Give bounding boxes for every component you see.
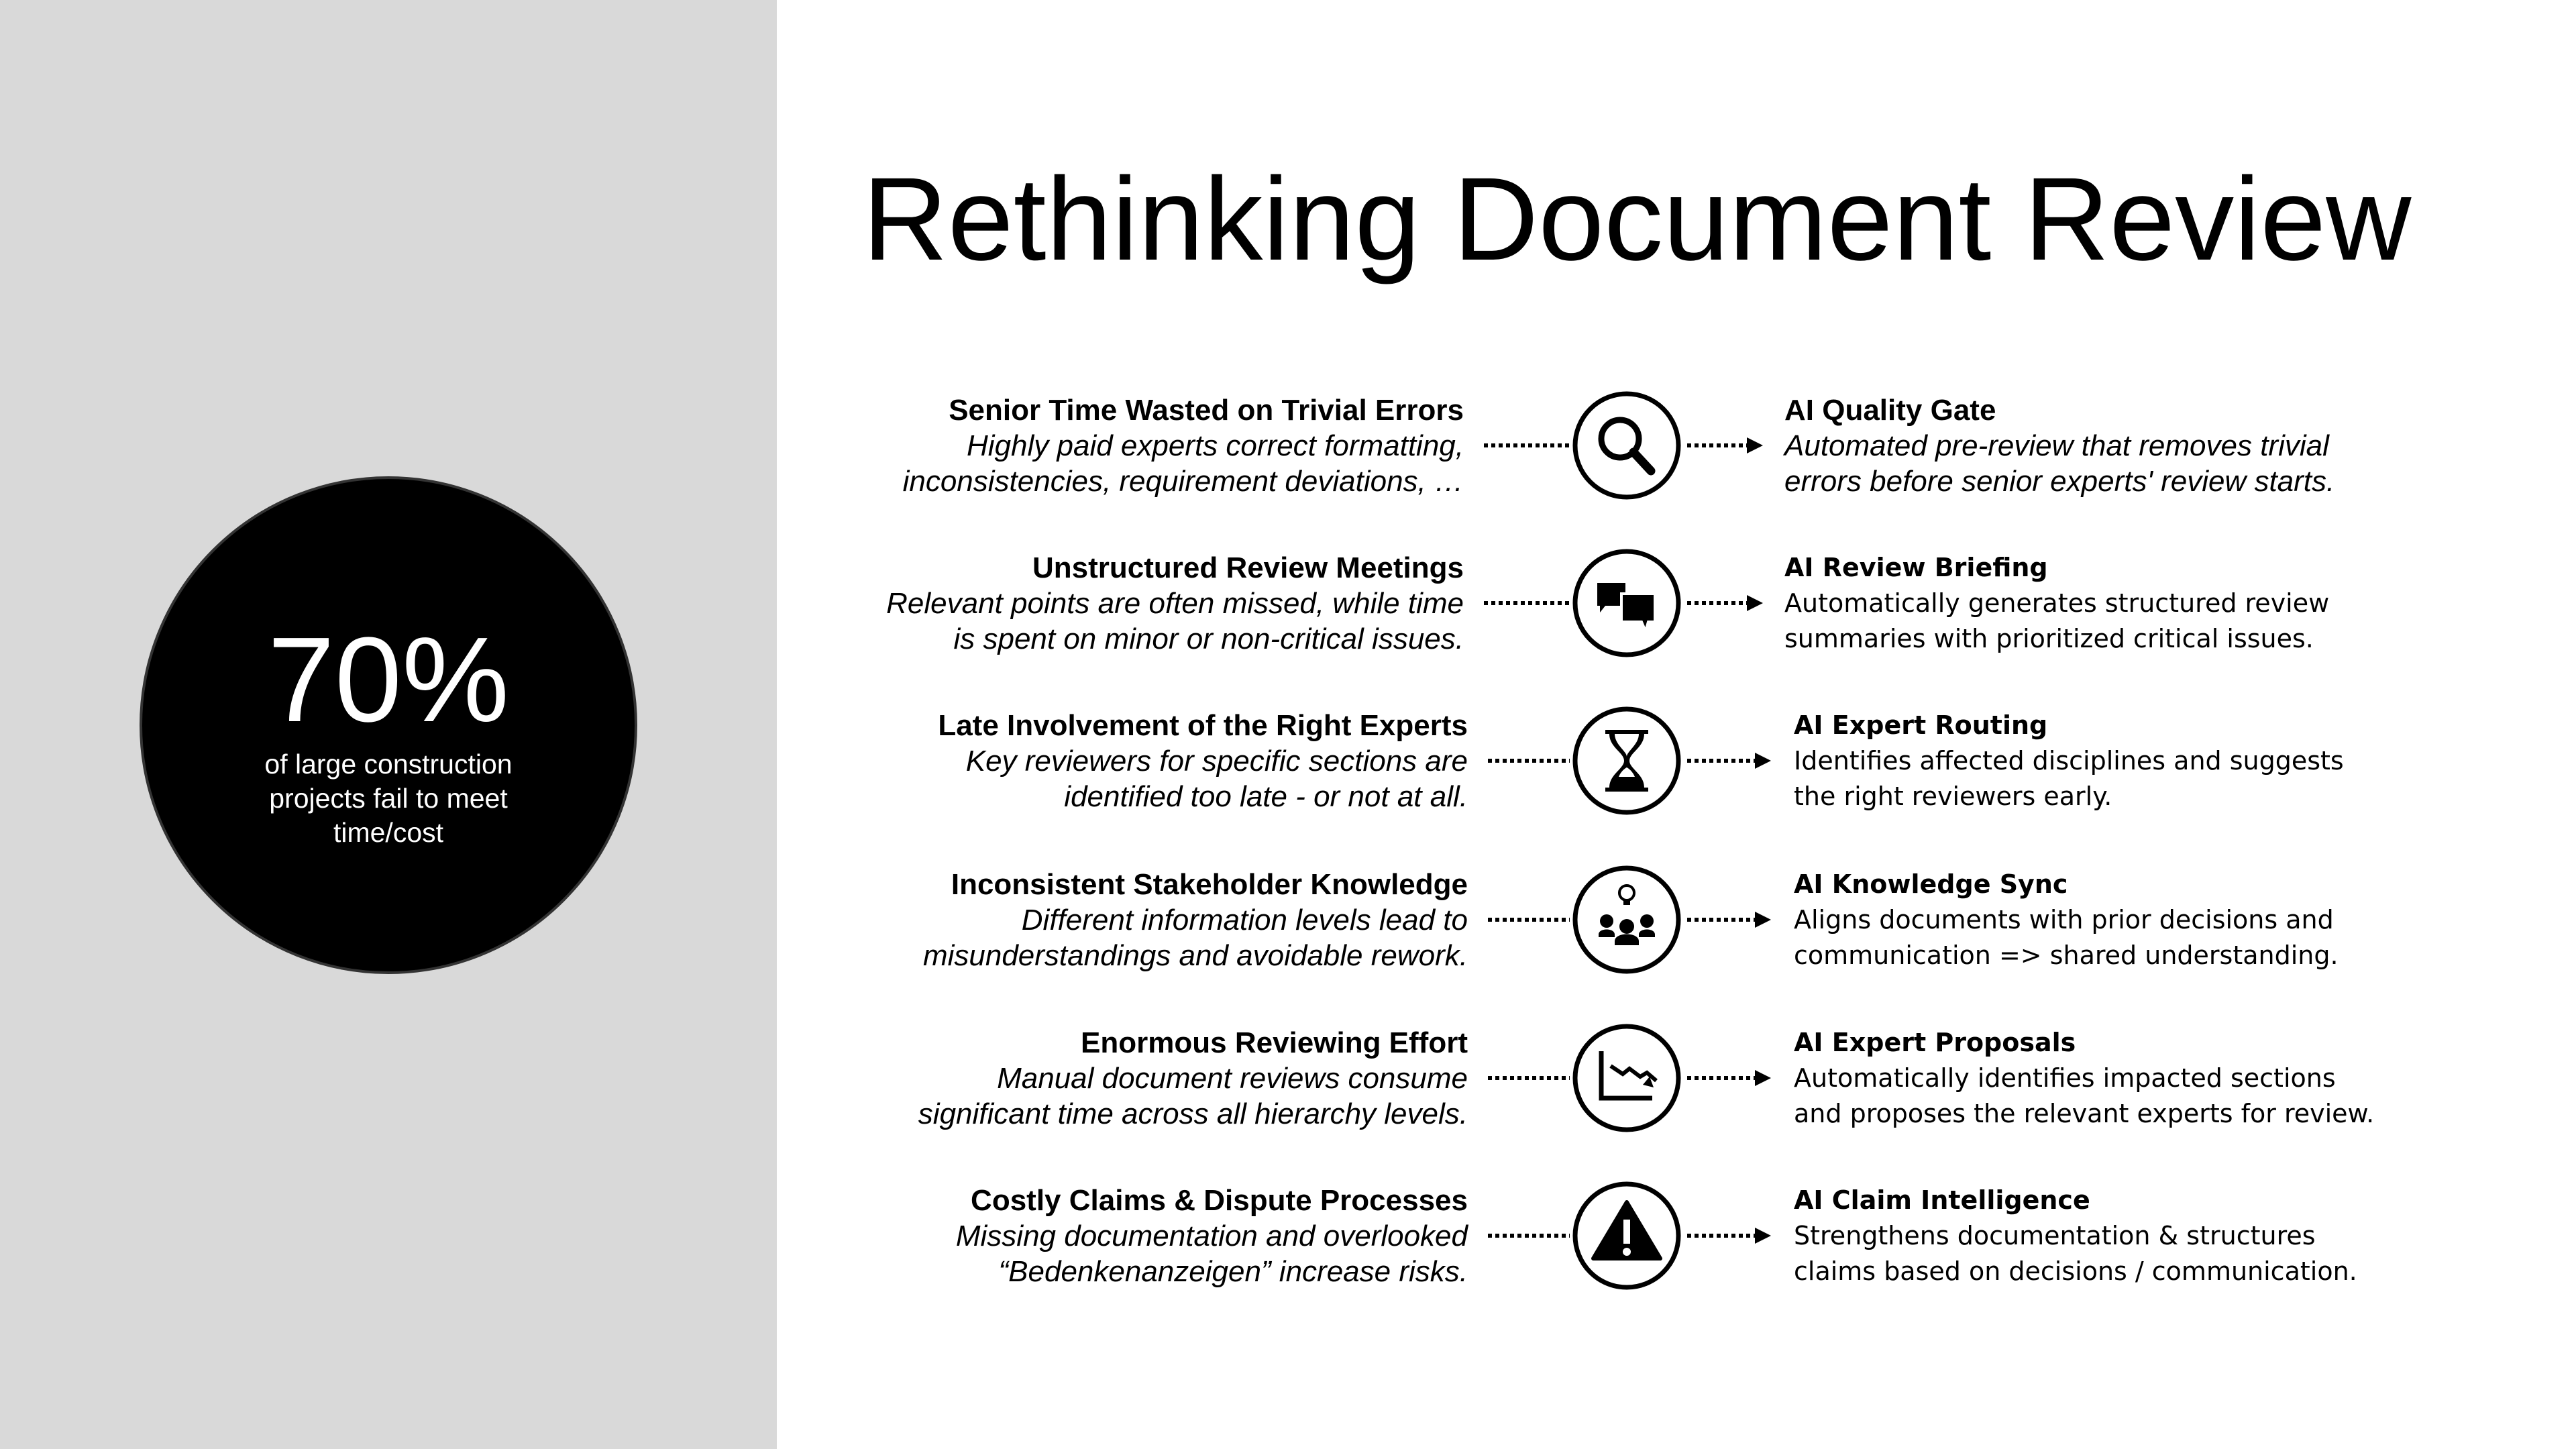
solution 2: AI Review Briefing <box>1784 553 2048 582</box>
solution 4 <box>1794 869 2339 970</box>
problem 3 <box>938 709 1468 813</box>
solution 4: AI Knowledge Sync <box>1794 869 2068 899</box>
problem 2: Unstructured Review Meetings <box>1032 551 1464 584</box>
solution 1 <box>1783 394 2334 498</box>
stat number: 70% <box>268 612 509 747</box>
title: Rethinking Document Review <box>863 154 2411 285</box>
problem 3: Key reviewers for specific sections are <box>966 745 1468 777</box>
problem 2: Relevant points are often missed, while time <box>886 587 1464 620</box>
problem 4: misunderstandings and avoidable rework. <box>923 939 1468 972</box>
stat caption: of large construction <box>264 749 513 780</box>
icon: warning <box>1575 1184 1678 1287</box>
solution 6: claims based on decisions / communication. <box>1794 1256 2357 1286</box>
problem 6: “Bedenkenanzeigen” increase risks. <box>998 1255 1468 1288</box>
solution 5 <box>1794 1028 2374 1128</box>
problem 5 <box>918 1026 1468 1130</box>
problem 5: significant time across all hierarchy levels. <box>918 1097 1468 1130</box>
solution 6: AI Claim Intelligence <box>1794 1185 2090 1215</box>
problem 3: identified too late - or not at all. <box>1064 780 1468 813</box>
icon: declining chart <box>1575 1026 1678 1130</box>
solution 2 <box>1784 553 2329 653</box>
solution 5: and proposes the relevant experts for review. <box>1794 1099 2374 1128</box>
problem 5: Enormous Reviewing Effort <box>1081 1026 1468 1059</box>
stat caption: projects fail to meet <box>269 783 508 814</box>
problem 1: Highly paid experts correct formatting, <box>967 429 1464 462</box>
solution 5: Automatically identifies impacted sections <box>1794 1063 2336 1093</box>
solution 1: errors before senior experts' review starts. <box>1784 465 2334 498</box>
problem 3: Late Involvement of the Right Experts <box>938 709 1468 742</box>
solution 5: AI Expert Proposals <box>1794 1028 2076 1057</box>
solution 4: Aligns documents with prior decisions and <box>1794 905 2334 934</box>
problem 4: Different information levels lead to <box>1022 904 1468 936</box>
solution 1: AI Quality Gate <box>1784 394 1996 427</box>
problem 6 <box>956 1184 1469 1288</box>
solution 3: Identifies affected disciplines and suggests <box>1794 746 2344 775</box>
solution 3 <box>1794 710 2344 811</box>
stat caption: time/cost <box>333 817 443 848</box>
solution 6: Strengthens documentation & structures <box>1794 1221 2316 1250</box>
stat circle <box>140 476 637 974</box>
solution 3: AI Expert Routing <box>1794 710 2047 740</box>
problem 4 <box>923 868 1468 972</box>
solution 2: summaries with prioritized critical issues. <box>1784 624 2314 653</box>
problem 4: Inconsistent Stakeholder Knowledge <box>951 868 1468 901</box>
left panel <box>0 0 777 1449</box>
solution 3: the right reviewers early. <box>1794 782 2112 811</box>
problem 1: Senior Time Wasted on Trivial Errors <box>949 394 1464 427</box>
solution 2: Automatically generates structured review <box>1784 588 2329 618</box>
icon: chat bubbles <box>1575 551 1678 655</box>
problem 1: inconsistencies, requirement deviations, … <box>903 465 1464 498</box>
problem 1 <box>903 394 1464 498</box>
problem 2 <box>886 551 1464 655</box>
icon: people with bulb <box>1575 868 1678 971</box>
solution 1: Automated pre-review that removes trivial <box>1784 429 2329 462</box>
problem 6: Missing documentation and overlooked <box>956 1220 1468 1252</box>
icon: magnifier <box>1575 394 1678 497</box>
problem 6: Costly Claims & Dispute Processes <box>971 1184 1468 1217</box>
stat caption <box>264 749 513 848</box>
solution 6 <box>1794 1185 2357 1286</box>
icon: hourglass <box>1575 709 1678 812</box>
problem 2: is spent on minor or non-critical issues. <box>953 623 1464 655</box>
problem 5: Manual document reviews consume <box>997 1062 1468 1095</box>
solution 4: communication => shared understanding. <box>1794 941 2339 970</box>
